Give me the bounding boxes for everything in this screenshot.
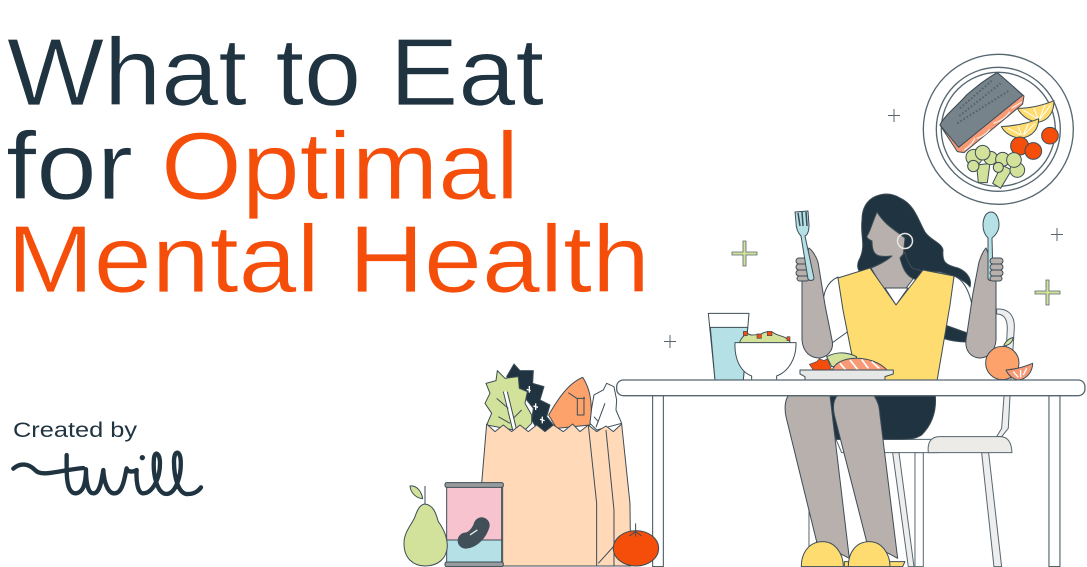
broccoli: [977, 163, 990, 183]
left leg: [785, 396, 849, 558]
table legs: [653, 396, 663, 567]
tomatoes: [1042, 127, 1058, 144]
neck and face: [867, 212, 920, 305]
skirt: [825, 395, 936, 439]
orange: [1004, 337, 1013, 346]
twill logo: [13, 453, 201, 494]
vest: [838, 268, 954, 381]
title: Optimal: [161, 113, 519, 220]
hair back: [858, 194, 970, 287]
pear: [404, 504, 447, 566]
title: What to Eat: [7, 19, 544, 126]
dark kale: [507, 364, 553, 432]
title: Mental Health: [7, 206, 650, 313]
spoon: [983, 212, 999, 280]
created by credit: Created by: [13, 419, 138, 442]
canned beans: [447, 486, 502, 540]
sleeves: [823, 277, 850, 343]
fork: [795, 211, 814, 280]
table top: [617, 380, 1085, 396]
title: [6, 19, 650, 313]
title: for: [6, 113, 133, 220]
table scene: [617, 313, 1085, 567]
hair strand: [900, 252, 925, 280]
grocery bag group: [404, 364, 659, 567]
green lettuce: [485, 371, 532, 432]
right leg: [833, 396, 898, 558]
lemons: [1017, 101, 1054, 122]
white collar: [885, 288, 908, 305]
illustration: woman: [795, 194, 1003, 381]
left arm: [802, 248, 832, 358]
sweet potato: [549, 377, 591, 428]
right fingers: [990, 258, 1003, 281]
salmon: [940, 73, 1024, 153]
right arm: [966, 248, 996, 358]
tomato: [613, 531, 659, 566]
slippers: [844, 562, 905, 567]
plate of salmon, lemon, tomato and broccoli: [923, 54, 1073, 204]
left fingers: [796, 258, 809, 281]
plate: [923, 54, 1073, 204]
sparkles: [664, 109, 1063, 348]
glass of water: [708, 313, 749, 380]
white leaf: [590, 383, 622, 430]
earring: [898, 234, 912, 248]
green sparkles: [732, 241, 1060, 305]
dinner with salmon: [827, 353, 857, 367]
paper bag: [482, 424, 631, 566]
illustration: chair: [809, 309, 1014, 567]
skirt side: [942, 325, 973, 342]
bowl of salad: [739, 332, 790, 344]
plate: [800, 370, 893, 380]
